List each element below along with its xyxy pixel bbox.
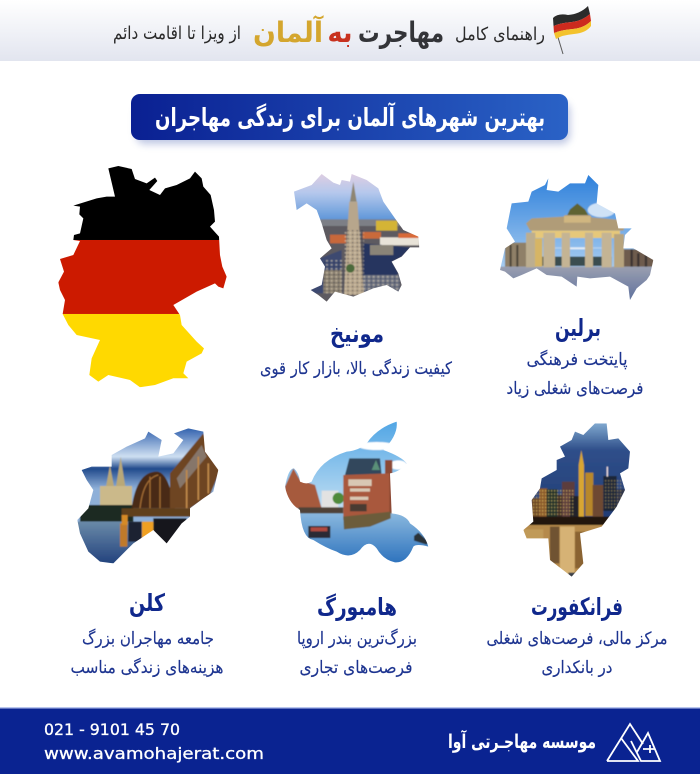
- panel: Munich: [260, 170, 453, 379]
- icon: German flag: [553, 6, 591, 54]
- header band: [0, 0, 700, 61]
- header text: guide: راهنمای کامل: [455, 24, 545, 45]
- header text: visa to residency: از ویزا تا اقامت دائم: [113, 23, 241, 44]
- description: Cologne line 1: جامعه مهاجران بزرگ: [82, 628, 214, 649]
- city name: Cologne: کلن: [129, 589, 165, 617]
- panel: Berlin: [497, 173, 657, 399]
- phone number: 021 - 9101 45 70: [44, 720, 180, 739]
- header text: migration: مهاجرت: [358, 16, 444, 49]
- icon: company logo: [607, 724, 660, 761]
- website: www.avamohajerat.com: [44, 744, 264, 763]
- panel: Hamburg: [280, 418, 433, 678]
- photo map: Frankfurt: [524, 424, 630, 576]
- title banner: [131, 94, 570, 144]
- header text: to: به: [328, 16, 352, 49]
- description: Munich: کیفیت زندگی بالا، بازار کار قوی: [260, 358, 453, 379]
- footer: [0, 707, 700, 774]
- photo map: Munich: [294, 174, 420, 302]
- city name: Berlin: برلین: [555, 314, 601, 342]
- header text: Germany: آلمان: [253, 15, 324, 49]
- company name: موسسه مهاجـرتی آوا: [448, 729, 596, 753]
- photo map: Hamburg: [285, 422, 428, 562]
- description: Cologne line 2: هزینه‌های زندگی مناسب: [70, 657, 224, 678]
- panel: Cologne: [70, 427, 224, 678]
- description: Hamburg line 2: فرصت‌های تجاری: [300, 658, 412, 678]
- map: Germany flag: [58, 166, 227, 388]
- title banner: بهترین شهرهای آلمان برای زندگی مهاجران: [155, 102, 545, 133]
- description: Berlin line 1: پایتخت فرهنگی: [526, 349, 628, 370]
- description: Frankfurt line 2: در بانکداری: [542, 658, 612, 678]
- photo map: Berlin: [497, 173, 657, 303]
- city name: Hamburg: هامبورگ: [317, 593, 397, 621]
- description: Hamburg line 1: بزرگ‌ترین بندر اروپا: [297, 628, 417, 649]
- description: Berlin line 2: فرصت‌های شغلی زیاد: [506, 379, 644, 399]
- panel: Frankfurt: [486, 420, 668, 678]
- city name: Munich: مونیخ: [330, 320, 384, 348]
- photo map: Cologne: [73, 427, 223, 565]
- city name: Frankfurt: فرانکفورت: [531, 593, 623, 621]
- description: Frankfurt line 1: مرکز مالی، فرصت‌های شغلی: [486, 629, 668, 649]
